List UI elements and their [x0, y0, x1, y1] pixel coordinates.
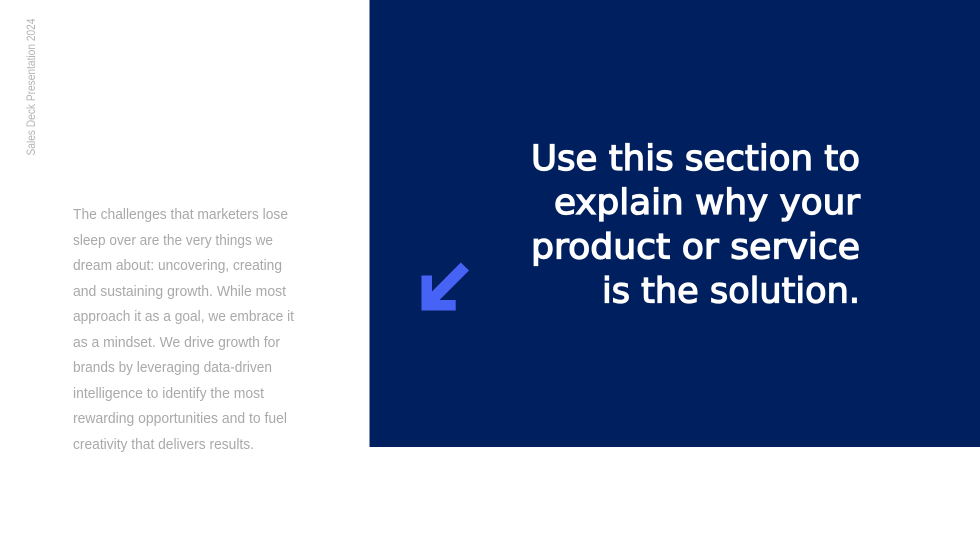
heading: [531, 139, 861, 312]
body text block: The challenges that marketers lose: [73, 206, 288, 223]
body text block: rewarding opportunities and to fuel: [73, 410, 287, 427]
body text block: sleep over are the very things we: [73, 232, 273, 249]
icon: arrow pointing down-left: [422, 262, 469, 310]
body text block: as a mindset. We drive growth for: [73, 334, 280, 351]
body text block: brands by leveraging data-driven: [73, 359, 272, 376]
heading: is the solution.: [602, 272, 860, 312]
body text block: approach it as a goal, we embrace it: [73, 308, 295, 325]
heading: Use this section to: [531, 139, 860, 179]
heading: explain why your: [554, 183, 861, 223]
body text block: and sustaining growth. While most: [73, 283, 287, 300]
body text block: intelligence to identify the most: [73, 385, 265, 402]
body text block: dream about: uncovering, creating: [73, 257, 282, 274]
body text block: [73, 206, 295, 453]
body text block: creativity that delivers results.: [73, 436, 254, 453]
panel: navy background: [370, 0, 980, 447]
heading: product or service: [531, 228, 860, 268]
